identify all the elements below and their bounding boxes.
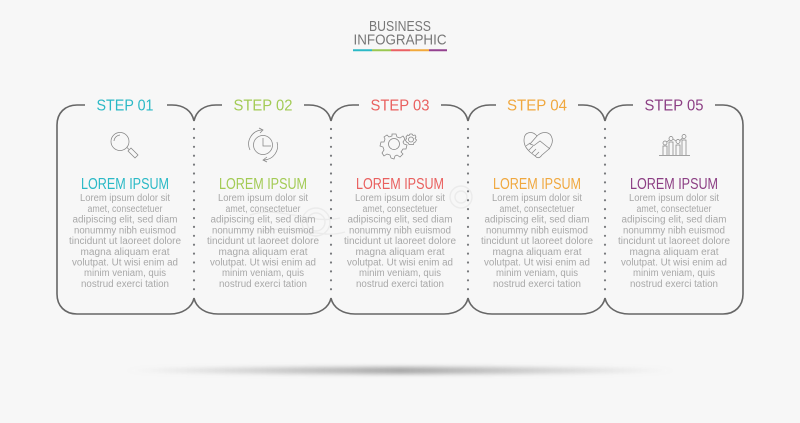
step 5 body text: adipiscing elit, sed diam bbox=[622, 214, 726, 226]
step 3 body text: nonummy nibh euismod bbox=[349, 225, 451, 236]
step 4 heading: LOREM IPSUM bbox=[493, 176, 581, 193]
step 1 body text: nonummy nibh euismod bbox=[74, 225, 176, 236]
step 3 body text: amet, consectetuer bbox=[362, 204, 438, 215]
step 4 body text: nonummy nibh euismod bbox=[486, 225, 588, 236]
step 5 label: STEP 05 bbox=[644, 98, 704, 114]
step 2 body text: amet, consectetuer bbox=[226, 204, 301, 215]
step 3 label: STEP 03 bbox=[370, 98, 430, 114]
step 1 body text: magna aliquam erat bbox=[80, 247, 170, 258]
step 2 body text: Lorem ipsum dolor sit bbox=[218, 193, 308, 204]
step 5 body text: nostrud exerci tation bbox=[630, 279, 718, 290]
dotted dividers bbox=[194, 129, 605, 292]
panel: step 1 bbox=[69, 98, 182, 290]
step 3 body text: minim veniam, quis bbox=[359, 268, 441, 279]
panel: step 3 bbox=[344, 98, 457, 290]
step 4 body text: nostrud exerci tation bbox=[493, 279, 581, 290]
step 1 heading: LOREM IPSUM bbox=[81, 176, 169, 193]
icon: gears bbox=[380, 134, 416, 159]
title bbox=[354, 19, 446, 48]
step 5 body text: minim veniam, quis bbox=[633, 268, 715, 279]
step 1 label: STEP 01 bbox=[96, 98, 154, 114]
step 2 body text: tincidunt ut laoreet dolore bbox=[207, 236, 320, 247]
step 5 heading: LOREM IPSUM bbox=[630, 176, 718, 193]
step 5 body text: Lorem ipsum dolor sit bbox=[629, 193, 719, 204]
step 4 body text: amet, consectetuer bbox=[500, 204, 575, 215]
step 1 body text: Lorem ipsum dolor sit bbox=[80, 193, 170, 204]
step 3 body text bbox=[344, 193, 457, 290]
step 5 body text bbox=[618, 193, 731, 290]
step 5 body text: amet, consectetuer bbox=[636, 204, 712, 215]
step 1 body text bbox=[69, 193, 182, 290]
icon: bar chart bbox=[659, 134, 690, 156]
step 1 body text: adipiscing elit, sed diam bbox=[72, 214, 178, 226]
step 3 heading: LOREM IPSUM bbox=[356, 176, 444, 193]
step 1 body text: volutpat. Ut wisi enim ad bbox=[72, 258, 178, 269]
step 3 body text: magna aliquam erat bbox=[356, 247, 445, 258]
step 4 body text: magna aliquam erat bbox=[492, 247, 582, 258]
timeline frame outline bbox=[57, 105, 743, 314]
title rainbow underline bbox=[353, 49, 447, 51]
panel: step 4 bbox=[481, 98, 594, 290]
icon: handshake heart bbox=[524, 132, 552, 158]
step 4 body text: volutpat. Ut wisi enim ad bbox=[484, 258, 590, 269]
step 5 body text: volutpat. Ut wisi enim ad bbox=[621, 258, 727, 269]
panel: step 5 bbox=[618, 98, 731, 290]
step 5 body text: tincidunt ut laoreet dolore bbox=[618, 236, 731, 247]
title: BUSINESS bbox=[369, 19, 431, 35]
step 1 body text: nostrud exerci tation bbox=[81, 279, 169, 290]
step 2 body text bbox=[207, 193, 320, 290]
icon: magnifying glass bbox=[111, 132, 138, 158]
step 5 body text: magna aliquam erat bbox=[630, 247, 719, 258]
step 4 body text: Lorem ipsum dolor sit bbox=[492, 193, 582, 204]
step 1 body text: amet, consectetuer bbox=[88, 204, 163, 215]
step 2 heading: LOREM IPSUM bbox=[219, 176, 307, 193]
step 2 body text: volutpat. Ut wisi enim ad bbox=[210, 258, 316, 269]
step 3 body text: Lorem ipsum dolor sit bbox=[355, 193, 445, 204]
step 1 body text: minim veniam, quis bbox=[84, 268, 166, 279]
step 2 body text: minim veniam, quis bbox=[222, 268, 304, 279]
step 3 body text: adipiscing elit, sed diam bbox=[348, 214, 452, 226]
step 3 body text: volutpat. Ut wisi enim ad bbox=[347, 258, 453, 269]
panel: step 2 bbox=[207, 98, 320, 290]
title: INFOGRAPHIC bbox=[354, 32, 446, 48]
step 2 body text: nostrud exerci tation bbox=[219, 279, 307, 290]
step 2 body text: adipiscing elit, sed diam bbox=[210, 214, 316, 226]
step 3 body text: nostrud exerci tation bbox=[356, 279, 444, 290]
step 3 body text: tincidunt ut laoreet dolore bbox=[344, 236, 457, 247]
step 4 body text: tincidunt ut laoreet dolore bbox=[481, 236, 594, 247]
step 4 body text: adipiscing elit, sed diam bbox=[484, 214, 590, 226]
step 4 body text: minim veniam, quis bbox=[496, 268, 578, 279]
step 2 label: STEP 02 bbox=[234, 98, 293, 114]
ground shadow bbox=[124, 367, 676, 374]
step 1 body text: tincidunt ut laoreet dolore bbox=[69, 236, 182, 247]
step 2 body text: nonummy nibh euismod bbox=[212, 225, 314, 236]
step 2 body text: magna aliquam erat bbox=[218, 247, 308, 258]
icon: clock with arrows bbox=[249, 128, 278, 162]
step 4 body text bbox=[481, 193, 594, 290]
step 5 body text: nonummy nibh euismod bbox=[623, 225, 725, 236]
watermark bbox=[250, 186, 472, 236]
step 4 label: STEP 04 bbox=[507, 98, 567, 114]
